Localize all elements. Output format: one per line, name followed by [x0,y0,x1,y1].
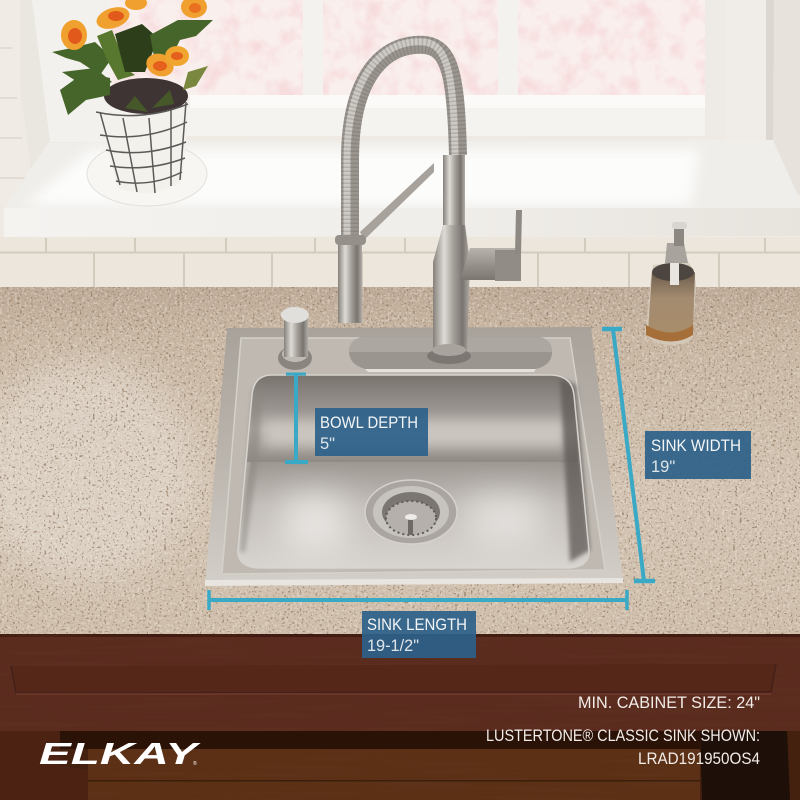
drain strainer [365,480,457,544]
window and wall background [0,0,800,289]
saucer [87,142,207,206]
stainless steel sink [205,307,623,586]
pot [96,100,190,193]
minimum cabinet size note: MIN. CABINET SIZE: 24" [578,693,760,712]
window sill [4,140,800,237]
plant in wire pot [52,0,213,206]
backsplash subway tile [0,237,800,289]
label: sink length 19-1/2 inches: SINK LENGTH [367,616,467,634]
kitchen faucet [335,42,522,364]
dimension line: sink length [208,590,628,610]
granite countertop [0,287,800,636]
model note: LRAD191950OS4 [638,749,760,768]
support arm [360,163,434,240]
window glass: blossoms outside [100,0,710,100]
soap dispenser [278,307,312,370]
Elkay logo: ELKAY [39,736,202,771]
bowl side shading [560,378,590,562]
model note: LUSTERTONE® CLASSIC SINK SHOWN: [486,726,760,745]
label: sink width 19 inches: SINK WIDTH [651,437,741,455]
label: bowl depth 5 inches: 5" [320,435,335,453]
bowl back wall [247,375,578,462]
soil [104,78,188,114]
deck plate [349,337,552,372]
window frame [8,0,800,197]
dimension line: bowl depth [285,374,308,462]
wire mesh [96,102,188,193]
label: bowl depth 5 inches [315,408,428,456]
pull-down sprayer [335,235,366,323]
glass soap bottle [646,222,696,345]
spring hose [347,42,458,240]
label: sink length 19-1/2 inches [362,611,476,658]
lower cabinet opening [0,731,800,800]
label: sink width 19 inches: 19" [651,458,675,476]
model note [486,726,760,768]
handle [460,210,522,281]
foliage [52,20,213,115]
bowl floor [238,455,588,568]
label: bowl depth 5 inches: BOWL DEPTH [320,414,418,432]
bowl rim line [238,375,589,568]
wall tile left [0,0,30,205]
dimension line: sink width [602,329,655,581]
cabinet top rail and drawer panel [0,634,800,732]
wood cabinet [0,634,800,800]
sink rim [205,327,623,584]
flowers [61,0,207,80]
floor reflections [285,495,345,550]
Elkay logo [39,736,202,771]
label: sink length 19-1/2 inches: 19-1/2" [367,637,419,655]
faucet body [427,155,471,364]
label: sink width 19 inches [645,431,751,479]
Elkay logo: ® [193,760,197,767]
